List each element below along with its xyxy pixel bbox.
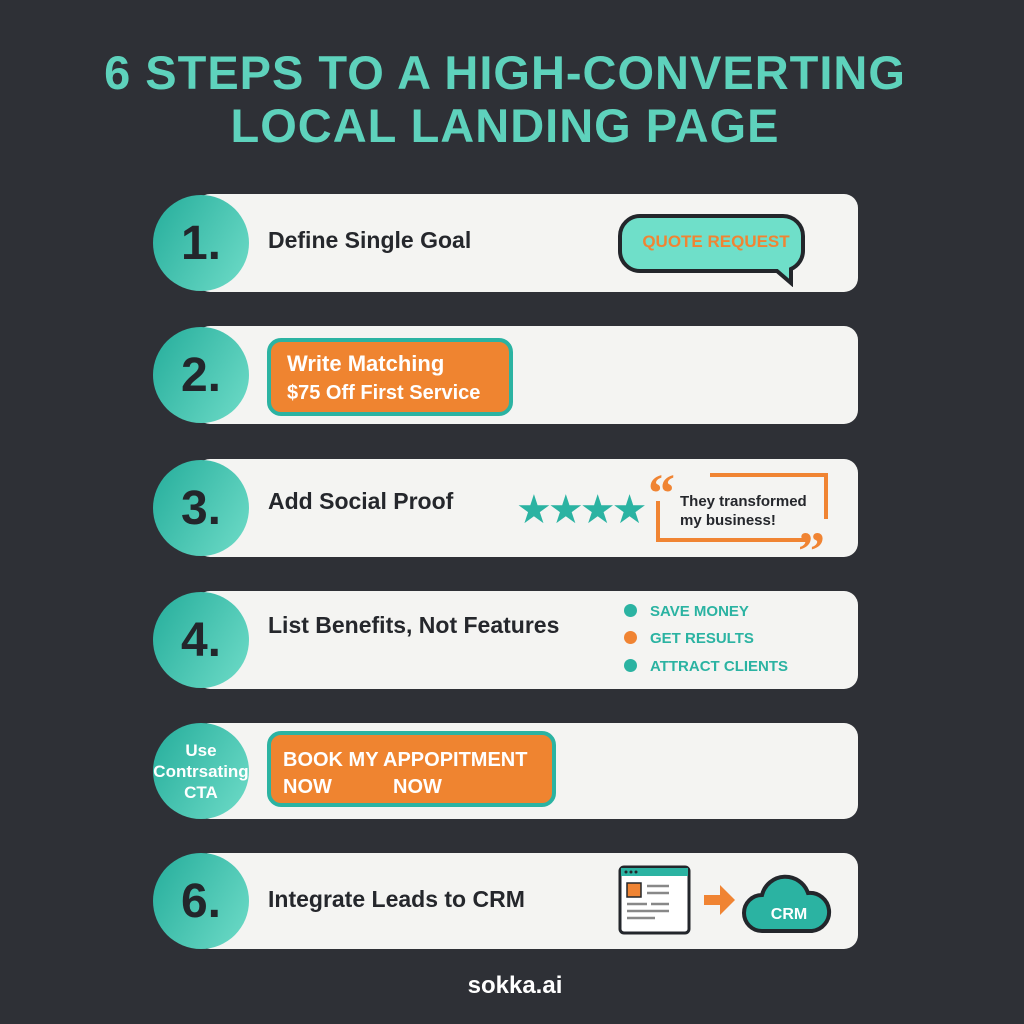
number 3: 3.	[181, 482, 221, 534]
number 4: 4.	[181, 614, 221, 666]
panel: step 5	[153, 723, 858, 819]
number 2	[153, 327, 249, 423]
benefits list: SAVE MONEY	[650, 603, 749, 620]
benefits list	[624, 603, 788, 675]
label 3: Add Social Proof	[268, 488, 453, 514]
title: 6 STEPS TO A HIGH-CONVERTING	[104, 46, 906, 99]
speech bubble: QUOTE REQUEST	[642, 232, 790, 251]
benefits list: GET RESULTS	[650, 630, 754, 647]
panel: step 3	[153, 459, 858, 557]
number 4	[153, 592, 249, 688]
title: LOCAL LANDING PAGE	[231, 99, 779, 152]
label 6: Integrate Leads to CRM	[268, 886, 525, 912]
circle: use contrasting CTA	[153, 723, 249, 819]
number 2: 2.	[181, 348, 221, 402]
speech bubble	[618, 214, 805, 287]
testimonial quote	[648, 469, 828, 554]
CTA button	[267, 731, 556, 807]
offer button: Write Matching	[287, 351, 444, 376]
circle: use contrasting CTA: CTA	[184, 782, 218, 802]
testimonial quote: my business!	[680, 512, 776, 529]
panel: step 4	[153, 591, 858, 689]
panel: step 2	[153, 326, 858, 424]
panel: step 1	[153, 194, 858, 292]
CTA button: BOOK MY APPOPITMENT	[283, 749, 527, 771]
stars: ★★★★	[516, 488, 643, 532]
number 3	[153, 460, 249, 556]
icon: webpage to CRM cloud: CRM	[771, 906, 807, 923]
number 6: 6.	[181, 874, 221, 928]
title	[104, 46, 906, 152]
offer button: $75 Off First Service	[287, 382, 480, 404]
circle: use contrasting CTA: Contrsating	[153, 762, 249, 780]
number 6	[153, 853, 249, 949]
number 1: 1.	[181, 216, 221, 270]
CTA button: NOW NOW	[283, 776, 442, 798]
label 1: Define Single Goal	[268, 227, 471, 253]
label 4: List Benefits, Not Features	[268, 612, 559, 638]
circle: use contrasting CTA: Use	[185, 740, 217, 760]
number 1	[153, 195, 249, 291]
testimonial quote: They transformed	[680, 493, 807, 510]
offer button	[267, 338, 513, 416]
benefits list: ATTRACT CLIENTS	[650, 658, 788, 675]
panel: step 6	[153, 853, 858, 949]
footer brand: sokka.ai	[468, 972, 562, 999]
icon: webpage to CRM cloud	[618, 866, 832, 934]
